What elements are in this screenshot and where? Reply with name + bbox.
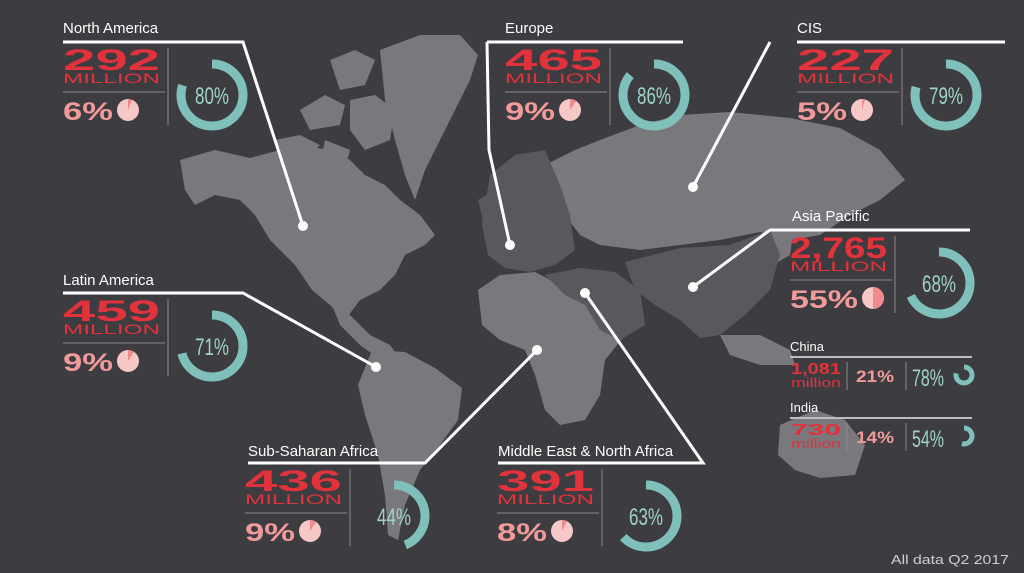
map: north america xyxy=(180,145,435,320)
map: greenland xyxy=(380,35,478,200)
panel: middle east & north africa: 391 xyxy=(497,465,594,498)
map: russia xyxy=(545,112,905,250)
panel: india: million xyxy=(791,436,841,451)
map: europe xyxy=(482,150,575,272)
panel: europe xyxy=(505,44,685,126)
panel: north america: 6% xyxy=(63,98,113,126)
panel: cis: MILLION xyxy=(797,70,894,86)
panel: china: 1,081 xyxy=(791,361,841,378)
panel: north america: 80% xyxy=(195,83,229,110)
world map xyxy=(180,35,905,540)
panel: sub-saharan africa: MILLION xyxy=(245,491,342,507)
panel: asia pacific: 2,765 xyxy=(790,232,887,265)
panel: sub-saharan africa: 9% xyxy=(245,519,295,547)
panel: latin america: 9% xyxy=(63,349,113,377)
panel: china: China xyxy=(790,339,825,354)
map: southeast asia islands xyxy=(720,335,795,365)
panel: china: 21% xyxy=(856,367,894,386)
panel: cis: 227 xyxy=(797,44,894,77)
panel: europe: MILLION xyxy=(505,70,602,86)
panel: india: 54% xyxy=(912,426,944,453)
panel: india: 730 xyxy=(791,422,841,439)
map: south america xyxy=(358,350,462,540)
panel: sub-saharan africa: 436 xyxy=(245,465,342,498)
footnote: All data Q2 2017 xyxy=(891,552,1009,567)
headings: CIS xyxy=(797,20,822,37)
panel: sub-saharan africa xyxy=(245,465,425,547)
panel: asia pacific: 55% xyxy=(790,286,858,314)
panel: north america: MILLION xyxy=(63,70,160,86)
panel: cis xyxy=(797,44,977,126)
map: africa xyxy=(478,272,625,425)
map: asia pacific xyxy=(625,230,780,338)
panel: europe: 465 xyxy=(505,44,602,77)
panel: cis: 79% xyxy=(929,83,963,110)
panel: asia pacific xyxy=(790,232,970,314)
headings: Sub-Saharan Africa xyxy=(248,443,379,460)
map: arctic islands xyxy=(275,50,395,170)
panel: asia pacific: MILLION xyxy=(790,258,887,274)
panel: europe: 9% xyxy=(505,98,555,126)
panel: latin america: 71% xyxy=(195,334,229,361)
panel: india: 14% xyxy=(856,428,894,447)
headings: Europe xyxy=(505,20,553,37)
map: australia xyxy=(778,410,865,478)
headings: Latin America xyxy=(63,272,155,289)
headings: North America xyxy=(63,20,159,37)
panel: north america xyxy=(63,44,243,126)
panel: india xyxy=(790,400,972,453)
panel: north america: 292 xyxy=(63,44,160,77)
connector lines and dots xyxy=(63,42,1005,463)
panel: latin america: MILLION xyxy=(63,321,160,337)
panel: middle east & north africa xyxy=(497,465,677,547)
panel: europe: 86% xyxy=(637,83,671,110)
map: central america xyxy=(330,300,395,358)
panel: india: India xyxy=(790,400,819,415)
headings: Asia Pacific xyxy=(792,208,870,225)
panel: middle east & north africa: MILLION xyxy=(497,491,594,507)
panel: china xyxy=(790,339,972,392)
map: middle east xyxy=(545,268,645,340)
map: uk xyxy=(478,192,497,225)
panel: china: 78% xyxy=(912,365,944,392)
panel: sub-saharan africa: 44% xyxy=(377,504,411,531)
panel: latin america: 459 xyxy=(63,295,160,328)
panel: china: million xyxy=(791,375,841,390)
panel: middle east & north africa: 63% xyxy=(629,504,663,531)
panel: latin america xyxy=(63,295,243,377)
map: japan xyxy=(770,212,795,262)
panel: asia pacific: 68% xyxy=(922,271,956,298)
headings xyxy=(63,20,870,460)
headings: Middle East & North Africa xyxy=(498,443,674,460)
panel: cis: 5% xyxy=(797,98,847,126)
panel: middle east & north africa: 8% xyxy=(497,519,547,547)
